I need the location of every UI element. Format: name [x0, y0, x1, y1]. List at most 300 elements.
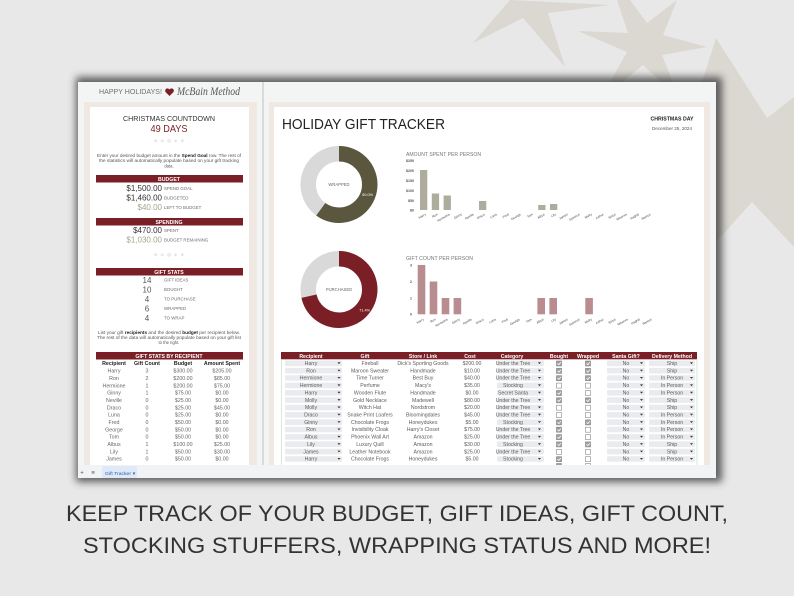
row 10: No	[623, 427, 629, 433]
table: gift stats by recipient: $45.00	[214, 405, 230, 411]
row 10	[285, 427, 695, 433]
recipient instructions: to the right.	[159, 340, 179, 345]
panel: budget: $1,500.00	[126, 184, 163, 193]
row 5	[285, 390, 695, 396]
panel: spending: SPENT	[164, 228, 179, 233]
table: gift stats by recipient: 0	[146, 398, 149, 404]
row 14: Harry	[305, 457, 318, 463]
row 6: Under the Tree	[496, 398, 530, 404]
table: gift tracker: Wrapped	[577, 354, 599, 360]
row 9: No	[623, 420, 629, 426]
table: gift stats by recipient: GIFT STATS BY RECIPIENT	[135, 354, 203, 360]
bar chart: gift count per person: 1	[410, 296, 412, 300]
christmas day date: December 25, 2024	[652, 126, 693, 131]
panel: gift stats: 10	[143, 286, 152, 294]
panel: budget	[96, 175, 243, 212]
panel: gift stats: GIFT IDEAS	[164, 278, 188, 282]
table: gift stats by recipient: Amount Spent	[204, 361, 240, 367]
table: gift stats by recipient: Harry	[108, 368, 121, 374]
bar chart: gift count per person: Luna	[488, 317, 497, 324]
row 3: Under the Tree	[496, 376, 530, 382]
row 4	[285, 383, 695, 389]
recipient instructions	[97, 330, 242, 345]
row 12	[285, 441, 695, 448]
table: gift stats by recipient: $50.00	[175, 427, 191, 433]
row 14: Stocking	[503, 457, 523, 463]
row 6: Molly	[305, 398, 317, 404]
table: gift stats by recipient: $85.00	[214, 376, 230, 382]
row 8: In Person	[661, 412, 683, 418]
sheet tab bar	[78, 465, 716, 478]
table: gift tracker: Delivery Method	[652, 354, 692, 360]
icon: heart	[165, 88, 174, 96]
table: gift stats by recipient: $25.00	[175, 405, 191, 411]
panel: spending	[96, 218, 243, 244]
countdown: 49 DAYS	[150, 123, 188, 135]
bar chart: amount spent per person: Remus	[641, 212, 652, 221]
table: gift stats by recipient: 3	[146, 368, 149, 374]
bar chart: amount spent per person: $100	[406, 189, 414, 193]
row 10: $75.00	[464, 427, 480, 433]
bar chart: amount spent per person: James	[558, 212, 569, 221]
donut chart: purchased	[308, 259, 371, 320]
row 3: Hermione	[300, 376, 322, 382]
row 1: Ship	[667, 361, 677, 367]
bar chart: amount spent per person: Albus	[537, 212, 546, 220]
budget instructions: the statistics will automatically populate based on your gift tracking	[99, 158, 240, 163]
bar chart: gift count per person: Molly	[584, 317, 593, 325]
panel: gift stats: BOUGHT	[164, 287, 183, 292]
bar chart: gift count per person: Ron	[429, 317, 437, 324]
row 13: James	[303, 449, 319, 455]
table: gift stats by recipient: Hermione	[103, 383, 126, 389]
row 1: Fireball	[361, 361, 379, 367]
table: gift stats by recipient: Lily	[110, 449, 118, 455]
bar chart: gift count per person: 0	[410, 312, 412, 316]
panel: budget: LEFT TO BUDGET	[164, 205, 202, 210]
donut chart: wrapped: WRAPPED	[328, 182, 350, 187]
panel: left sidebar	[84, 84, 257, 465]
bar chart: amount spent per person: Minerva	[616, 212, 628, 222]
table: gift stats by recipient: 0	[146, 435, 149, 441]
table: gift stats by recipient: Draco	[107, 405, 121, 411]
bar chart: amount spent per person: $0	[410, 208, 414, 212]
donut chart: purchased: 71.4%	[359, 308, 371, 312]
bar chart: gift count per person: Albus	[536, 317, 545, 325]
row 4: Hermione	[300, 383, 322, 389]
ornament: ✦ ✶ ❄ ✶ ✦	[153, 252, 185, 259]
recipient instructions: The rest of the data will automatically populate based on your gift list	[97, 335, 242, 340]
row 3: Best Buy	[413, 376, 434, 382]
panel: gift stats: 4	[145, 314, 150, 323]
ornament: ✦ ✶ ❄ ✶ ✦	[153, 138, 185, 145]
table: gift stats by recipient: James	[106, 457, 122, 463]
row 12: Luxury Quill	[356, 442, 384, 448]
table: gift stats by recipient: 0	[146, 427, 149, 433]
row 11: No	[623, 435, 629, 441]
title: HOLIDAY GIFT TRACKER	[282, 116, 445, 133]
table: gift stats by recipient: $50.00	[175, 435, 191, 441]
donut chart: purchased: PURCHASED	[326, 287, 352, 292]
row 11: In Person	[661, 435, 683, 441]
christmas day date: CHRISTMAS DAY	[650, 116, 694, 122]
row 4: Perfume	[360, 383, 380, 389]
row 11: $25.00	[464, 435, 480, 441]
table: gift stats by recipient: $25.00	[175, 413, 191, 419]
countdown: CHRISTMAS COUNTDOWN	[123, 116, 215, 123]
screen shadow	[76, 77, 722, 482]
caption: STOCKING STUFFERS, WRAPPING STATUS AND MORE!	[83, 533, 711, 558]
row 13: Under the Tree	[496, 449, 530, 455]
row 2	[285, 368, 695, 374]
row 8	[285, 412, 695, 418]
row 2: Maroon Sweater	[351, 368, 389, 374]
row 10: Invisibility Cloak	[352, 427, 389, 433]
row 5: Secret Santa	[498, 390, 528, 396]
bar chart: gift count per person: George	[509, 317, 521, 326]
row 5: $0.00	[466, 390, 479, 396]
caption: KEEP TRACK OF YOUR BUDGET, GIFT IDEAS, GIFT COUNT,	[66, 501, 728, 526]
row 3	[285, 375, 695, 382]
bar chart: amount spent per person: Tom	[526, 212, 534, 219]
row 7: Witch Hat	[359, 405, 382, 411]
bar chart: amount spent per person: Harry	[418, 212, 427, 220]
row 7: $20.00	[464, 405, 480, 411]
table: gift stats by recipient: George	[105, 427, 123, 433]
panel: gift stats: TO WRAP	[164, 316, 184, 320]
row 9: Chocolate Frogs	[351, 420, 389, 426]
row 6: Gold Necklace	[353, 398, 387, 404]
table: gift stats by recipient: $100.00	[173, 442, 193, 448]
sheet tab bar: ≡	[91, 470, 95, 476]
panel: gift stats: 14	[143, 276, 152, 285]
table: gift tracker	[281, 352, 697, 468]
brand header	[99, 84, 241, 98]
row 2: Under the Tree	[496, 368, 530, 374]
table: gift stats by recipient: $0.00	[215, 413, 229, 419]
table: gift stats by recipient: Budget	[174, 361, 192, 367]
bar chart: amount spent per person: Molly	[584, 212, 593, 220]
row 11: Amazon	[413, 435, 433, 441]
table: gift stats by recipient: 1	[146, 449, 149, 455]
table: gift stats by recipient: Ron	[109, 376, 119, 382]
row 6: Ship	[667, 398, 677, 404]
bar chart: amount spent per person: Lily	[550, 212, 557, 218]
bar chart: gift count per person: Draco	[475, 317, 485, 325]
budget instructions: Enter your desired budget amount in the Spend Goal row. The rest of	[97, 153, 242, 158]
table: gift stats by recipient: Neville	[106, 398, 122, 404]
row 9: In Person	[661, 420, 683, 426]
panel: spending: SPENDING	[155, 220, 183, 226]
bar chart: amount spent per person: Hagrid	[629, 212, 640, 221]
table: gift stats by recipient: 0	[146, 420, 149, 426]
row 13: Ship	[667, 449, 677, 455]
row 7: No	[623, 405, 629, 411]
table: gift stats by recipient: $30.00	[214, 449, 230, 455]
row 9: Ginny	[304, 420, 318, 426]
donut chart: wrapped	[308, 154, 374, 215]
panel: gift stats: GIFT STATS	[154, 270, 184, 276]
bar chart: amount spent per person: Fred	[502, 212, 510, 219]
row 6: $80.00	[464, 398, 480, 404]
brand header: HAPPY HOLIDAYS!	[99, 87, 162, 96]
row 2: Handmade	[410, 368, 436, 374]
bar chart: amount spent per person: Hermione	[437, 212, 451, 223]
row 2: No	[623, 368, 629, 374]
row 13: $25.00	[464, 449, 480, 455]
table: gift tracker: Bought	[550, 354, 568, 360]
checkmarks	[558, 362, 590, 460]
row 7: Molly	[305, 405, 317, 411]
bar chart: gift count per person: James	[558, 317, 569, 326]
row 4: Stocking	[503, 383, 523, 389]
row 8: Snake Print Loafers	[347, 412, 393, 418]
table: gift stats by recipient: $205.00	[212, 368, 232, 374]
row 4: In Person	[661, 383, 683, 389]
row 10: Under the Tree	[496, 427, 530, 433]
christmas day date	[650, 116, 694, 131]
sheet tab bar: ▾	[133, 472, 136, 477]
row 1	[285, 360, 695, 367]
row 3: No	[623, 376, 629, 382]
bar chart: gift count per person	[406, 256, 653, 328]
partial row 15 checkboxes	[556, 463, 591, 465]
row 13: No	[623, 449, 629, 455]
panel: spending: $470.00	[133, 226, 163, 235]
panel: budget: $1,460.00	[126, 194, 163, 202]
table: gift tracker: Cost	[464, 354, 476, 360]
row 14: No	[623, 457, 629, 463]
row 12: $30.00	[464, 442, 480, 448]
table: gift stats by recipient: 1	[146, 391, 149, 397]
decorative stars	[473, 0, 794, 260]
panel: budget: BUDGETED	[164, 195, 188, 200]
row 11: Under the Tree	[496, 435, 530, 441]
table: gift stats by recipient: $50.00	[175, 420, 191, 426]
panel: gift stats: 6	[145, 304, 150, 314]
bar chart: gift count per person: Severus	[568, 317, 581, 327]
row 10: Harry's Closet	[407, 427, 440, 433]
table: gift stats by recipient: $0.00	[215, 457, 229, 463]
row 8: Bloomingdales	[406, 412, 440, 418]
table: gift stats by recipient: $200.00	[173, 376, 193, 382]
sheet tab bar: Gift Tracker	[105, 471, 131, 477]
table: gift stats by recipient: Gift Count	[134, 361, 160, 367]
bar chart: gift count per person: Hagrid	[630, 317, 641, 326]
table: gift stats by recipient: $25.00	[175, 398, 191, 404]
row 4: $35.00	[464, 383, 480, 389]
table: gift stats by recipient: Albus	[107, 442, 121, 448]
table: gift stats by recipient: Fred	[109, 420, 119, 426]
bar chart: amount spent per person: Neville	[464, 212, 475, 221]
row 7: Under the Tree	[496, 405, 530, 411]
table: gift stats by recipient: $50.00	[175, 457, 191, 463]
row 12: Lily	[307, 442, 315, 448]
row 7: Ship	[667, 405, 677, 411]
row 5: Wooden Flute	[354, 390, 386, 396]
bar chart: gift count per person: Minerva	[617, 317, 629, 327]
panel: gift stats: WRAPPED	[164, 306, 186, 311]
bar chart: gift count per person: Lily	[550, 317, 557, 323]
row 1: Dick's Sporting Goods	[397, 361, 449, 367]
row 11: Albus	[305, 435, 318, 441]
row 11: Phoenix Wall Art	[351, 435, 389, 441]
panel: budget: SPEND GOAL	[164, 186, 193, 191]
row 14: Chocolate Frogs	[351, 457, 389, 463]
panel: budget: BUDGET	[158, 177, 181, 183]
bar chart: gift count per person: Harry	[416, 317, 425, 325]
row 4: No	[623, 383, 629, 389]
bar chart: amount spent per person: Severus	[568, 212, 581, 222]
row 7	[285, 405, 695, 411]
row 4: Macy's	[415, 383, 431, 389]
row 12: Stocking	[503, 442, 523, 448]
bar chart: amount spent per person: Draco	[476, 212, 486, 220]
row 9	[285, 419, 695, 426]
table: gift tracker: Store / Link	[409, 354, 437, 360]
caption	[66, 501, 728, 558]
row 1: $200.00	[463, 361, 481, 367]
row 12: Amazon	[413, 442, 433, 448]
bar chart: gift count per person: Arthur	[595, 317, 605, 325]
row 2: Ron	[306, 368, 316, 374]
budget instructions: data.	[164, 164, 174, 168]
bar chart: gift count per person: 2	[410, 280, 412, 284]
table: gift stats by recipient: $0.00	[215, 435, 229, 441]
row 8: Draco	[304, 412, 318, 418]
table: gift stats by recipient: $300.00	[173, 368, 193, 374]
row 2: $10.00	[464, 368, 480, 374]
bar chart: amount spent per person: Luna	[489, 212, 498, 219]
bar chart: amount spent per person: Sirius	[608, 212, 617, 220]
row 3: In Person	[661, 376, 683, 382]
bar chart: gift count per person: Ginny	[451, 317, 461, 325]
panel: spending: $1,030.00	[126, 236, 163, 244]
row 11	[285, 434, 695, 441]
table: gift stats by recipient: 1	[146, 383, 149, 389]
row 9: Stocking	[503, 420, 523, 426]
row 5: No	[623, 390, 629, 396]
table: gift stats by recipient: $75.00	[175, 391, 191, 397]
row 3: $40.00	[464, 376, 480, 382]
row 8: Under the Tree	[496, 412, 530, 418]
table: gift stats by recipient: $50.00	[175, 449, 191, 455]
row 6: Madewell	[412, 398, 434, 404]
table: gift stats by recipient	[96, 352, 243, 463]
table: gift stats by recipient: $0.00	[215, 420, 229, 426]
table: gift stats by recipient: 0	[146, 457, 149, 463]
panel: tracker sheet	[269, 102, 710, 468]
table: gift stats by recipient: $0.00	[215, 427, 229, 433]
table: gift tracker: Recipient	[299, 354, 323, 360]
row 8: No	[623, 412, 629, 418]
table: gift stats by recipient: $75.00	[214, 383, 230, 389]
row 10: Ron	[306, 427, 316, 433]
bar chart: amount spent per person: Arthur	[595, 212, 605, 220]
row 5: Harry	[305, 390, 318, 396]
row 8: $45.00	[464, 412, 480, 418]
table: gift stats by recipient: $0.00	[215, 391, 229, 397]
recipient instructions: List your gift recipients and the desired budget per recipient below.	[98, 330, 240, 335]
row 13	[285, 449, 695, 455]
row 5: Handmade	[410, 390, 436, 396]
bar chart: gift count per person: Sirius	[608, 317, 617, 325]
row 9: $5.00	[466, 420, 479, 426]
panel: gift stats: TO PURCHASE	[164, 296, 196, 302]
bar chart: amount spent per person: AMOUNT SPENT PER PERSON	[406, 152, 481, 158]
bar chart: amount spent per person: George	[510, 212, 522, 221]
bar chart: gift count per person: Hermione	[435, 317, 449, 328]
row 13: Leather Notebook	[349, 449, 391, 455]
bar chart: amount spent per person: $250	[406, 159, 414, 163]
bar chart: gift count per person: Neville	[462, 317, 473, 326]
table: gift tracker: Category	[501, 354, 523, 360]
row 12: Ship	[667, 442, 677, 448]
donut chart: wrapped: 60.0%	[362, 193, 374, 197]
row 6: No	[623, 398, 629, 404]
bar chart: amount spent per person: $150	[406, 179, 414, 183]
dropdown arrows	[338, 362, 693, 460]
row 14: $5.00	[466, 457, 479, 463]
row 13: Amazon	[413, 449, 433, 455]
spreadsheet screen	[78, 82, 716, 478]
row 9: Honeydukes	[409, 420, 438, 426]
table: gift stats by recipient: $0.00	[215, 398, 229, 404]
row 3: Time Turner	[356, 376, 384, 382]
panel: budget: $40.00	[138, 203, 163, 212]
row 5: In Person	[661, 390, 683, 396]
row 2: Ship	[667, 368, 677, 374]
bar chart: amount spent per person: $50	[408, 199, 414, 203]
row 1: Under the Tree	[496, 361, 530, 367]
row 14: Honeydukes	[409, 457, 438, 463]
row 1: Harry	[305, 361, 318, 367]
row 12: No	[623, 442, 629, 448]
table: gift tracker: Santa Gift?	[612, 354, 640, 360]
bar chart: gift count per person: GIFT COUNT PER PERSON	[406, 256, 473, 262]
bar chart: gift count per person: Tom	[525, 317, 533, 324]
bar chart: amount spent per person: Ron	[431, 212, 439, 219]
table: gift stats by recipient: Luna	[108, 413, 120, 419]
table: gift stats by recipient: Ginny	[107, 391, 121, 397]
table: gift stats by recipient: $200.00	[173, 383, 193, 389]
bar chart: gift count per person: 3	[410, 264, 412, 268]
table: gift stats by recipient: 0	[146, 413, 149, 419]
bar chart: gift count per person: Remus	[642, 317, 653, 326]
row 1: No	[623, 361, 629, 367]
panel: gift stats	[96, 268, 243, 323]
table: gift stats by recipient: Recipient	[102, 361, 126, 367]
table: gift stats by recipient: 0	[146, 405, 149, 411]
sheet tab bar: +	[80, 470, 84, 476]
bar chart: amount spent per person: Ginny	[453, 212, 463, 220]
table: gift stats by recipient: 1	[146, 442, 149, 448]
row 6	[285, 397, 695, 404]
bar chart: gift count per person: Fred	[501, 317, 509, 324]
row 10: In Person	[661, 427, 683, 433]
row 14: In Person	[661, 457, 683, 463]
panel: gift stats: 4	[145, 295, 150, 304]
countdown	[123, 116, 214, 132]
table: gift stats by recipient: $25.00	[214, 442, 230, 448]
bar chart: amount spent per person: $200	[406, 169, 414, 173]
table: gift stats by recipient: Tom	[109, 435, 120, 441]
table: gift tracker: Gift	[361, 354, 370, 360]
bar chart: amount spent per person	[406, 152, 652, 223]
row 7: Nordstrom	[411, 405, 435, 411]
row 14	[285, 456, 695, 463]
panel: spending: BUDGET REMAINING	[164, 237, 209, 242]
